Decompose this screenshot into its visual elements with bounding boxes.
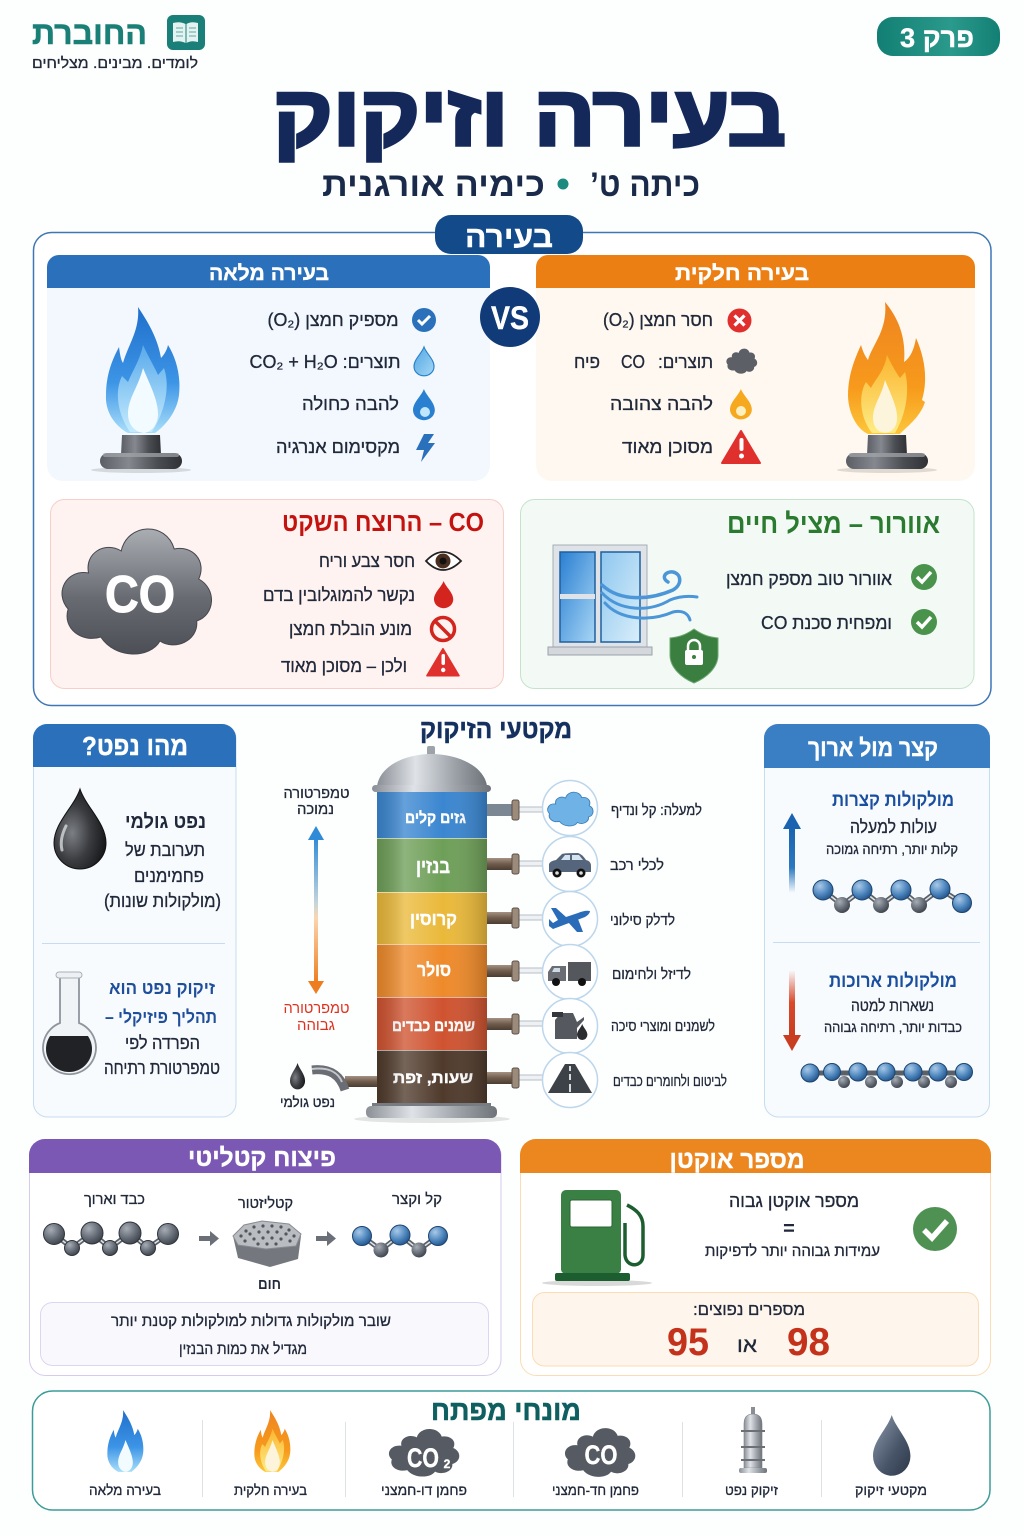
tower fractions — [377, 792, 487, 1103]
panel: key terms — [32, 1391, 990, 1510]
temperature scale: טמפרטורה — [284, 1000, 350, 1017]
chapter badge: פרק 3 — [900, 23, 974, 53]
molecule: short chain — [813, 879, 972, 913]
term: incomplete combustion: בעירה חלקית — [234, 1482, 307, 1498]
row: products CO and soot: פיח — [574, 352, 600, 372]
long molecules text: נשארות למטה — [851, 997, 934, 1015]
tower base — [366, 1103, 497, 1118]
note box: שובר מולקולות גדולות למולקולות קטנת יותר — [111, 1313, 391, 1330]
box: common numbers — [532, 1292, 978, 1366]
row: products: תוצרים: CO₂ + H₂O — [250, 352, 400, 372]
panel: CO silent killer — [50, 500, 504, 688]
term: refinery fractions: מקטעי זיקוק — [855, 1482, 927, 1498]
fraction: heavy oils: שמנים כבדים — [392, 1018, 475, 1035]
molecule: long chain — [801, 1063, 972, 1088]
icon: open book — [167, 15, 205, 50]
short molecules text: קלות יותר, רתיחה גמוכה — [826, 841, 958, 857]
temperature scale — [284, 785, 350, 1034]
text: refining — [104, 978, 220, 1078]
text: high octane: עמידות גבוהה יותר לדפיקות — [705, 1243, 880, 1260]
row: products CO and soot — [574, 349, 757, 374]
title: בעירה וזיקוק — [273, 69, 786, 164]
row: blue flame: להבה כחולה — [302, 394, 399, 414]
temperature scale: טמפרטורה — [284, 785, 350, 802]
panel: combustion — [34, 215, 991, 706]
fraction: diesel: סולר — [417, 960, 451, 980]
label: heavy and long: כבד וארוך — [84, 1191, 145, 1208]
fraction: kerosene: קרוסין — [410, 909, 457, 929]
row: very dangerous — [622, 431, 760, 463]
heading pill: combustion: בעירה — [465, 221, 553, 254]
panel: octane number — [520, 1139, 991, 1376]
row: blue flame — [302, 389, 435, 420]
subtitle: כיתה ט’ — [590, 166, 700, 204]
icon: blue flame on burner — [91, 307, 191, 473]
logo: החוברת — [32, 15, 205, 72]
logo: החוברת: לומדים. מבינים. מצליחים — [32, 55, 198, 72]
icon: fuel pump — [542, 1190, 652, 1286]
panel: CO silent killer: CO – הרוצח השקט — [282, 507, 484, 537]
panel: incomplete combustion: בעירה חלקית — [675, 262, 809, 285]
row: products CO and soot: CO — [621, 352, 645, 372]
row: reduces CO danger: ומפחית סכנת CO — [761, 613, 892, 633]
output: light gases — [542, 780, 702, 836]
row: lacking oxygen — [603, 308, 752, 332]
subtitle: כימיה אורגנית — [322, 166, 545, 204]
crude oil inlet — [280, 1063, 377, 1110]
fraction: waxes, tar — [377, 1050, 487, 1103]
box: common numbers: או — [737, 1334, 757, 1357]
row: yellow flame: להבה צהובה — [610, 394, 713, 414]
row: binds hemoglobin — [263, 581, 453, 608]
text: high octane — [705, 1191, 880, 1260]
panel: short vs long: קצר מול ארוך — [808, 735, 938, 762]
VS badge: VS — [491, 300, 529, 336]
fraction: kerosene — [377, 892, 487, 944]
term: carbon dioxide: פחמן דו-חמצני — [381, 1482, 467, 1498]
row: good ventilation — [726, 564, 937, 590]
output: vehicles — [542, 836, 664, 892]
text: refining: טמפרטורת רתיחה — [104, 1058, 220, 1078]
long molecules text: מולקולות ארוכות — [829, 971, 957, 992]
VS badge — [480, 287, 540, 347]
panel: what is oil: מהו נפט? — [82, 731, 188, 761]
row: enough oxygen: מספיק חמצן (O₂) — [268, 310, 398, 330]
icon: check — [913, 1207, 957, 1251]
panel: ventilation — [520, 500, 974, 688]
arrow: to catalyst — [199, 1231, 219, 1246]
box: common numbers: מספרים נפוצים: — [693, 1300, 805, 1319]
subtitle — [322, 166, 700, 204]
text: refining: הפרדה לפי — [125, 1033, 200, 1053]
output: lubricants — [542, 998, 715, 1054]
panel: incomplete combustion — [536, 255, 975, 481]
fraction: light gases: גזים קלים — [405, 809, 466, 827]
row: colorless: חסר צבע וריח — [319, 551, 415, 571]
long molecules text: כבדות יותר, רתיחה גבוהה — [824, 1019, 962, 1035]
fraction: gasoline — [377, 838, 487, 892]
fraction: light gases — [377, 792, 487, 838]
output: light gases: למעלה: קל ונדיף — [611, 802, 702, 819]
note box — [40, 1302, 488, 1366]
text: refining: תהליך פיזיקלי – — [105, 1007, 217, 1027]
heading: refinery fractions: מקטעי הזיקוק — [420, 714, 572, 744]
output: bitumen: לביטום ולחומרים כבדים — [613, 1073, 727, 1090]
term: carbon dioxide: 2 — [444, 1457, 451, 1471]
row: lacking oxygen: חסר חמצן (O₂) — [603, 310, 713, 330]
row: therefore dangerous — [281, 649, 459, 676]
label: heat: חום — [258, 1276, 281, 1293]
row: prevents oxygen transport: מונע הובלת חמצן — [289, 619, 412, 639]
icon: flask — [43, 972, 96, 1076]
text: crude oil: פחמימנים — [134, 866, 204, 886]
fraction: gasoline: בנזין — [416, 856, 450, 878]
term: complete combustion — [89, 1410, 161, 1498]
icon: orange flame on burner — [837, 302, 937, 473]
output: diesel and heating: לדיזל ולחימום — [612, 966, 691, 983]
panel: key terms: מונחי מפתח — [431, 1395, 581, 1426]
molecule: blue chain — [352, 1225, 448, 1258]
text: crude oil: (מולקולות שונות) — [104, 891, 221, 911]
row: maximum energy — [276, 434, 435, 462]
icon: crude oil drop — [54, 789, 106, 869]
side pipes — [487, 800, 543, 1088]
fraction: waxes, tar: שעות, זפת — [393, 1070, 473, 1087]
panel: ventilation: אוורור – מציל חיים — [727, 508, 940, 539]
logo: החוברת: החוברת — [32, 15, 147, 51]
box: common numbers: 95 — [667, 1321, 709, 1364]
row: yellow flame — [610, 389, 752, 419]
icon: CO cloud: CO — [105, 566, 175, 624]
short molecules text — [826, 790, 958, 857]
panel: catalytic cracking: פיצוח קטליטי — [188, 1144, 336, 1172]
icon: catalyst block — [233, 1221, 301, 1267]
arrow: down — [783, 970, 801, 1051]
term: refinery fractions — [855, 1415, 927, 1498]
term: carbon dioxide — [381, 1429, 467, 1498]
term: oil refining: זיקוק נפט — [725, 1482, 778, 1498]
text: high octane: מספר אוקטן גבוה — [729, 1191, 859, 1211]
molecule: gray chain — [44, 1222, 178, 1256]
output: vehicles: לכלי רכב — [610, 857, 664, 874]
term: oil refining — [725, 1407, 778, 1498]
row: very dangerous: מסוכן מאוד — [622, 437, 713, 457]
tower base shadow — [354, 1115, 510, 1123]
short molecules text: עולות למעלה — [850, 817, 937, 837]
panel: complete combustion — [47, 255, 490, 481]
text: crude oil: תערובת של — [125, 840, 205, 860]
fraction: diesel — [377, 944, 487, 997]
chart: distillation tower — [354, 746, 543, 1123]
label: light and short: קל וקצר — [392, 1191, 442, 1208]
term: incomplete combustion — [234, 1410, 307, 1498]
row: reduces CO danger — [761, 609, 937, 635]
heading pill: combustion — [435, 215, 583, 254]
icon: CO cloud — [62, 529, 212, 654]
temperature scale: נמוכה — [297, 801, 334, 818]
panel: complete combustion: בעירה מלאה — [209, 262, 329, 285]
output: lubricants: לשמנים ומוצרי סיכה — [611, 1018, 715, 1035]
note box: מגדיל את כמות הבנזין — [179, 1341, 307, 1358]
arrow: up — [783, 813, 801, 893]
panel: catalytic cracking — [29, 1139, 501, 1376]
row: binds hemoglobin: נקשר להמוגלובין בדם — [263, 585, 415, 605]
term: carbon monoxide: CO — [584, 1440, 618, 1470]
row: prevents oxygen transport — [289, 618, 454, 640]
output: bitumen — [542, 1052, 727, 1108]
row: products CO and soot: תוצרים: — [658, 352, 713, 372]
row: products — [250, 347, 434, 376]
term: complete combustion: בעירה מלאה — [89, 1482, 161, 1498]
row: enough oxygen — [268, 308, 436, 332]
text: crude oil — [104, 811, 221, 911]
row: therefore dangerous: ולכן – מסוכן מאוד — [281, 656, 407, 676]
panel: what is oil — [33, 724, 236, 1117]
short molecules text: מולקולות קצרות — [832, 790, 954, 811]
text: refining: זיקוק נפט הוא — [109, 978, 215, 998]
box: common numbers: 98 — [787, 1321, 830, 1364]
fraction: heavy oils — [377, 997, 487, 1050]
term: carbon dioxide: CO — [407, 1443, 439, 1473]
row: good ventilation: אוורור טוב מספק חמצן — [726, 569, 893, 589]
chapter badge — [877, 17, 1000, 56]
temperature scale: גבוהה — [297, 1017, 335, 1034]
text: crude oil: נפט גולמי — [125, 811, 206, 833]
label: catalyst: קטליזטור — [238, 1195, 293, 1212]
crude oil inlet: נפט גולמי — [280, 1094, 335, 1110]
text: high octane: = — [783, 1218, 795, 1240]
output: jet fuel — [542, 892, 675, 946]
term: carbon monoxide: פחמן חד-חמצני — [552, 1482, 639, 1498]
output: jet fuel: לדלק סילוני — [610, 912, 675, 929]
panel: short vs long — [764, 724, 990, 1117]
row: maximum energy: מקסימום אנרגיה — [276, 437, 400, 457]
output: diesel and heating — [542, 944, 691, 1000]
term: carbon monoxide — [552, 1428, 639, 1498]
tower dome — [372, 746, 491, 792]
panel: octane number: מספר אוקטן — [670, 1146, 804, 1174]
icon: window with wind — [548, 545, 697, 655]
long molecules text — [824, 971, 962, 1035]
arrow: from catalyst — [316, 1231, 336, 1246]
icon: shield with lock — [670, 629, 718, 683]
